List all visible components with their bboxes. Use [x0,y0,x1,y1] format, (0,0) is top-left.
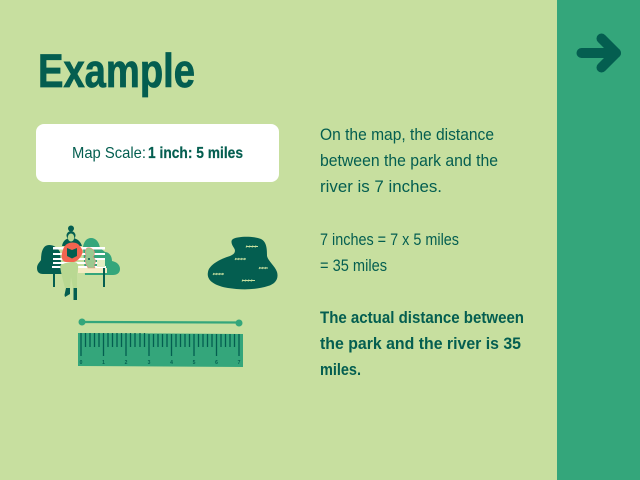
map scale callout: Map Scale: [72,145,146,162]
icon: next arrow [582,38,616,68]
ruler numbers [80,360,241,366]
grass tufts [213,246,268,282]
text block: conclusion [320,308,524,379]
illustration: river pond [208,237,278,289]
distance line with endpoints [78,318,242,326]
title: Example [38,44,195,97]
illustration: person on park bench [37,226,120,300]
ruler numbers: 0 [80,360,83,366]
text block: conclusion: the park and the river is 35 [320,334,521,353]
text block: calculation: 7 inches = 7 x 5 miles [320,230,459,249]
ruler numbers: 7 [238,360,241,366]
text block: calculation [320,230,459,275]
text block: conclusion: miles. [320,360,361,379]
ruler numbers: 3 [148,360,151,366]
frog companion [85,248,95,268]
text block: calculation: = 35 miles [320,256,387,275]
text block: conclusion: The actual distance between [320,308,524,327]
ruler numbers: 6 [215,360,218,366]
bench [52,247,107,287]
ruler numbers: 2 [125,360,128,366]
text block: map distance: On the map, the distance [320,125,494,144]
map scale callout: 1 inch: 5 miles [148,145,243,162]
person reading [60,226,83,300]
ruler numbers: 5 [193,360,196,366]
ruler numbers: 1 [102,360,105,366]
bushes [37,238,120,275]
sidebar panel [557,0,640,480]
ruler ticks [81,333,239,356]
text block: map distance: river is 7 inches. [320,177,442,196]
map scale callout [36,124,279,182]
ruler [78,333,243,367]
text block: map distance [320,125,498,196]
ruler numbers: 4 [170,360,173,366]
text block: map distance: between the park and the [320,151,498,170]
